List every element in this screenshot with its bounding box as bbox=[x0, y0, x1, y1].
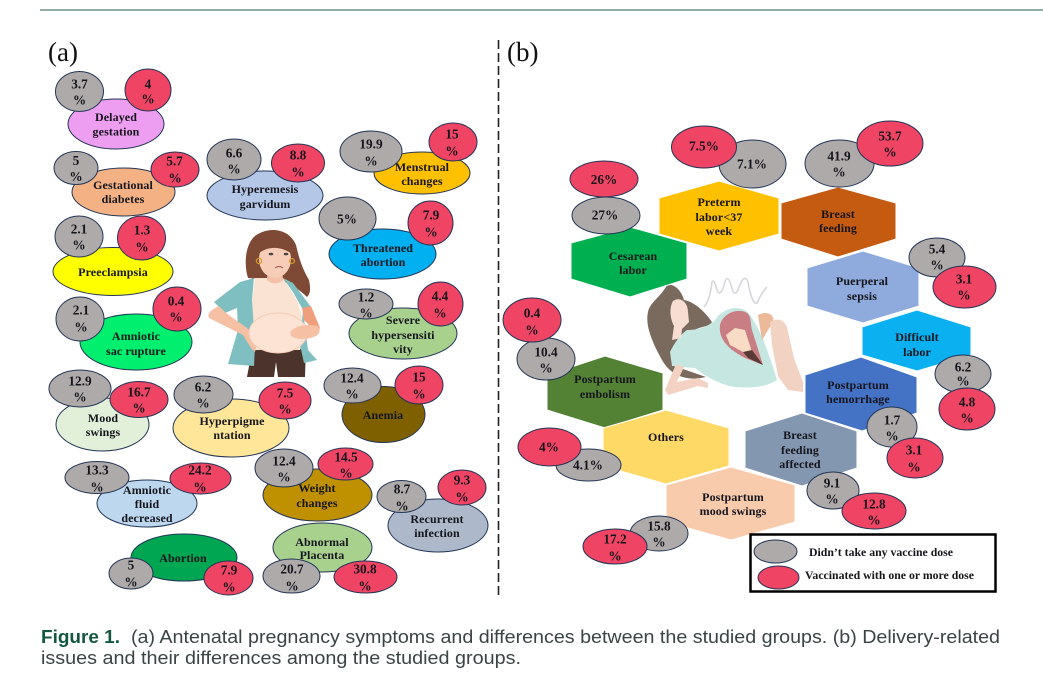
label: preeclampsia: Preeclampsia bbox=[78, 265, 148, 279]
label: postpartum embolism: Postpartum bbox=[574, 372, 636, 386]
bubble: gestational diabetes bbox=[72, 168, 175, 216]
values: breast feeding: % bbox=[832, 164, 846, 180]
label: abortion: Abortion bbox=[159, 551, 207, 565]
values: breast feeding: % bbox=[883, 144, 897, 160]
vaccinated value 7.9%: 7.9 bbox=[221, 562, 238, 578]
symptom: preeclampsia bbox=[53, 216, 173, 296]
values: preterm labor: 7.5% bbox=[689, 138, 719, 154]
vaccinated value 5.7%: % bbox=[168, 170, 182, 186]
no vaccine value 13.3% bbox=[65, 462, 129, 494]
vaccinated value 24.2%: % bbox=[193, 480, 207, 494]
hexagon: difficult labor bbox=[862, 310, 971, 371]
label: postpartum embolism: embolism bbox=[580, 387, 630, 401]
hexagon: others bbox=[603, 410, 729, 484]
vaccinated value 8.8%: 8.8 bbox=[290, 148, 307, 162]
vaccinated value 7.9% bbox=[408, 201, 453, 245]
hexagon: postpartum hemorrhage bbox=[805, 357, 917, 431]
caption: (a) Antenatal pregnancy symptoms and differences between the studied groups. (b) Delivery-related bbox=[131, 626, 1000, 647]
no vaccine value 20.7%: 20.7 bbox=[280, 562, 304, 576]
vaccinated value 8.8%: % bbox=[291, 164, 305, 180]
no vaccine value 5%: 5 bbox=[128, 558, 135, 572]
vaccinated value 5.7% bbox=[151, 152, 199, 187]
label: menstrual changes: Menstrual bbox=[395, 160, 450, 174]
vaccinated value 0.4%: % bbox=[169, 310, 183, 324]
no vaccine value 5% bbox=[109, 558, 153, 590]
icon: woman in labor illustration bbox=[647, 278, 803, 395]
symptom: threatened abortion bbox=[319, 197, 453, 279]
hexagon: postpartum embolism bbox=[547, 356, 663, 428]
symptom: hyperpigmentation bbox=[173, 376, 311, 457]
label: hyperemesis garvidum: garvidum bbox=[240, 197, 290, 211]
bubble: hyperpigmentation bbox=[173, 399, 289, 457]
bubble: preeclampsia bbox=[53, 248, 173, 296]
values: puerperal sepsis: 3.1 bbox=[956, 272, 972, 286]
values: postpartum hemorrhage bbox=[867, 407, 943, 478]
hexagon: postpartum mood swings bbox=[666, 467, 795, 540]
no vaccine value 6.2% bbox=[174, 376, 233, 413]
no vaccine value 12.9% bbox=[49, 370, 111, 407]
vaccinated value 16.7% bbox=[110, 382, 168, 418]
label: mood swings: Mood bbox=[88, 411, 118, 425]
vaccinated value 4.4%: 4.4 bbox=[432, 288, 449, 304]
label: others: Others bbox=[648, 430, 684, 444]
vaccinated value 7.9% bbox=[204, 561, 253, 595]
label: preterm labor: week bbox=[706, 224, 732, 238]
no vaccine value 3.7% bbox=[56, 72, 104, 112]
no vaccine value 5%: 5% bbox=[337, 212, 357, 226]
values: postpartum hemorrhage: 3.1 bbox=[906, 442, 922, 458]
values: breast feeding affected: 9.1 bbox=[824, 476, 840, 490]
label: amniotic fluid decreased: decreased bbox=[121, 511, 173, 525]
label: anemia: Anemia bbox=[363, 408, 403, 422]
values: cesarean labor: 27% bbox=[592, 208, 618, 222]
symptom: severe hypersensitivity bbox=[339, 282, 463, 359]
vaccinated value 7.5%: 7.5 bbox=[277, 386, 294, 400]
label: breast feeding: feeding bbox=[819, 221, 857, 235]
no vaccine value 12.4%: 12.4 bbox=[272, 454, 296, 468]
no vaccine value 19.9%: % bbox=[364, 154, 378, 168]
symptom: gestational diabetes bbox=[54, 152, 199, 216]
bubble: severe hypersensitivity bbox=[349, 308, 457, 359]
no vaccine value 12.4%: 12.4 bbox=[340, 370, 364, 386]
values: postpartum embolism: 0.4 bbox=[524, 306, 541, 320]
label: cesarean labor: labor bbox=[619, 263, 647, 277]
vaccinated value 4% bbox=[125, 69, 171, 111]
no vaccine value 1.2% bbox=[339, 289, 393, 320]
vaccinated value 15%: 15 bbox=[412, 370, 426, 384]
vaccinated value 1.3%: 1.3 bbox=[134, 222, 151, 238]
vaccinated value 4.4%: % bbox=[433, 306, 447, 320]
label: hyperpigmentation: ntation bbox=[213, 428, 251, 442]
no vaccine value 1.2%: % bbox=[359, 306, 373, 320]
vaccinated value 15% bbox=[395, 366, 443, 404]
vaccinated value 7.9%: 7.9 bbox=[423, 208, 440, 222]
vaccinated value 9.3%: 9.3 bbox=[454, 472, 471, 488]
vaccinated value 8.8% bbox=[272, 144, 324, 182]
vaccinated value 14.5%: % bbox=[339, 466, 353, 480]
label: gestational diabetes: diabetes bbox=[102, 192, 145, 206]
legend bbox=[750, 534, 996, 592]
values: postpartum mood swings: 17.2 bbox=[603, 532, 627, 546]
vaccinated value 7.9%: % bbox=[424, 224, 438, 240]
legend item: vaccinated bbox=[758, 566, 974, 589]
values: postpartum mood swings: % bbox=[652, 534, 666, 550]
vaccinated value 9.3% bbox=[438, 470, 486, 505]
values: preterm labor bbox=[672, 126, 786, 188]
no vaccine value 12.9%: % bbox=[73, 390, 87, 404]
no vaccine value 2.1% bbox=[55, 216, 103, 257]
no vaccine value 12.4% bbox=[324, 368, 381, 403]
no vaccine value 8.7%: 8.7 bbox=[394, 482, 411, 496]
no vaccine value 20.7%: % bbox=[285, 578, 299, 594]
vaccinated value 9.3%: % bbox=[455, 490, 469, 504]
vaccinated value 14.5%: 14.5 bbox=[334, 450, 358, 464]
icon: pregnant woman illustration bbox=[208, 230, 320, 377]
bubble: amniotic sac rupture bbox=[80, 314, 192, 370]
no vaccine value 2.1%: % bbox=[72, 238, 86, 252]
no vaccine value 20.7% bbox=[263, 559, 320, 594]
caption bbox=[41, 626, 1000, 668]
values: difficult labor bbox=[935, 355, 995, 430]
vaccinated value 1.3%: % bbox=[135, 240, 149, 254]
values: postpartum embolism: % bbox=[525, 322, 539, 338]
no vaccine value 13.3%: % bbox=[90, 480, 104, 494]
vaccinated value 16.7%: % bbox=[132, 400, 146, 416]
symptom: mood swings bbox=[49, 370, 168, 451]
label: delayed gestation: Delayed bbox=[95, 110, 137, 124]
vaccinated value 30.8%: % bbox=[358, 578, 372, 594]
vaccinated value 15%: 15 bbox=[445, 126, 459, 142]
vaccinated value 14.5% bbox=[318, 448, 373, 480]
vaccinated value 1.3% bbox=[118, 216, 166, 260]
label: amniotic sac rupture: sac rupture bbox=[106, 344, 167, 358]
no vaccine value 8.7%: % bbox=[395, 498, 409, 514]
values: postpartum embolism: 10.4 bbox=[534, 344, 558, 360]
values: difficult labor: % bbox=[956, 374, 970, 388]
no vaccine value 12.4% bbox=[255, 449, 313, 487]
no vaccine value 19.9% bbox=[340, 131, 402, 172]
bubble: anemia bbox=[342, 386, 425, 442]
values: breast feeding affected bbox=[807, 472, 906, 529]
bubble: delayed gestation bbox=[68, 99, 164, 149]
values: breast feeding affected: % bbox=[867, 512, 881, 528]
label: mood swings: swings bbox=[86, 425, 121, 439]
vaccinated value 15%: % bbox=[445, 144, 459, 158]
values: postpartum mood swings: % bbox=[608, 548, 622, 564]
values: puerperal sepsis bbox=[909, 238, 996, 308]
values: postpartum mood swings: 15.8 bbox=[647, 518, 671, 534]
vaccinated value 4%: 4 bbox=[145, 76, 152, 92]
label: cesarean labor: Cesarean bbox=[609, 249, 658, 263]
values: difficult labor: 4.8 bbox=[959, 394, 976, 410]
no vaccine value 2.1%: % bbox=[74, 320, 88, 334]
label: delayed gestation: gestation bbox=[93, 124, 140, 138]
no vaccine value 6.6%: % bbox=[227, 162, 241, 176]
bubble: amniotic fluid decreased bbox=[97, 480, 197, 527]
symptom: anemia bbox=[324, 366, 443, 442]
values: cesarean labor bbox=[570, 161, 640, 234]
no vaccine value 1.2%: 1.2 bbox=[358, 290, 375, 304]
caption: issues and their differences among the studied groups. bbox=[41, 647, 521, 668]
label: severe hypersensitivity: Severe bbox=[386, 313, 421, 327]
bubble: weight changes bbox=[263, 469, 372, 521]
values: puerperal sepsis: 5.4 bbox=[929, 242, 946, 256]
no vaccine value 12.4%: % bbox=[277, 470, 291, 484]
values: breast feeding bbox=[805, 121, 923, 187]
no vaccine value 8.7% bbox=[377, 480, 426, 514]
no vaccine value 6.6%: 6.6 bbox=[226, 146, 243, 160]
label: breast feeding affected: affected bbox=[779, 457, 821, 471]
symptom: amniotic fluid decreased bbox=[65, 462, 231, 527]
values: postpartum embolism bbox=[503, 298, 575, 380]
vaccinated value 7.9%: % bbox=[222, 580, 236, 594]
label: threatened abortion: abortion bbox=[361, 255, 406, 269]
label: recurrent infection: Recurrent bbox=[410, 512, 464, 526]
label: postpartum mood swings: Postpartum bbox=[702, 490, 764, 504]
bubble: abnormal placenta bbox=[273, 523, 372, 572]
panel label (b): (b) bbox=[507, 37, 538, 67]
values: postpartum hemorrhage: % bbox=[907, 460, 921, 474]
label: weight changes: changes bbox=[296, 496, 338, 510]
vaccinated value 5.7%: 5.7 bbox=[166, 154, 183, 168]
caption: Figure 1. bbox=[41, 626, 120, 647]
symptom: amniotic sac rupture bbox=[56, 287, 201, 370]
bubble: mood swings bbox=[56, 398, 149, 451]
hexagon: preterm labor bbox=[659, 181, 779, 251]
legend item: vaccinated: Vaccinated with one or more dose bbox=[805, 570, 974, 582]
symptom: weight changes bbox=[255, 448, 373, 521]
label: amniotic fluid decreased: fluid bbox=[135, 497, 159, 511]
panel label (a): (a) bbox=[48, 37, 78, 67]
label: weight changes: Weight bbox=[298, 481, 336, 495]
vaccinated value 15%: % bbox=[412, 386, 426, 402]
no vaccine value 2.1% bbox=[56, 297, 104, 341]
vaccinated value 0.4% bbox=[153, 287, 201, 331]
values: postpartum hemorrhage: % bbox=[885, 428, 899, 444]
values: postpartum embolism: % bbox=[539, 360, 553, 376]
no vaccine value 2.1%: 2.1 bbox=[71, 222, 87, 236]
vaccinated value 30.8% bbox=[334, 561, 397, 594]
vaccinated value 24.2%: 24.2 bbox=[188, 462, 212, 478]
values: postpartum hemorrhage: 1.7 bbox=[884, 412, 901, 428]
no vaccine value 5%: % bbox=[69, 169, 83, 184]
symptom: abortion bbox=[109, 534, 253, 595]
label: postpartum mood swings: mood swings bbox=[700, 504, 767, 518]
vaccinated value 7.5% bbox=[259, 382, 311, 419]
values: preterm labor: 7.1% bbox=[737, 156, 767, 172]
hexagon: cesarean labor bbox=[571, 227, 687, 297]
label: puerperal sepsis: Puerperal bbox=[836, 274, 889, 288]
vaccinated value 30.8%: 30.8 bbox=[353, 562, 377, 576]
no vaccine value 19.9%: 19.9 bbox=[359, 136, 383, 152]
label: recurrent infection: infection bbox=[414, 526, 460, 540]
vaccinated value 0.4%: 0.4 bbox=[168, 294, 185, 308]
panel: (a) antenatal pregnancy symptoms bbox=[48, 37, 488, 595]
vaccinated value 7.5%: % bbox=[278, 402, 292, 416]
hexagon: breast feeding bbox=[781, 187, 896, 257]
symptom: delayed gestation bbox=[56, 69, 171, 149]
no vaccine value 5%: % bbox=[124, 574, 138, 590]
symptom: recurrent infection bbox=[377, 470, 488, 552]
no vaccine value 3.7%: 3.7 bbox=[71, 76, 88, 92]
label: breast feeding: Breast bbox=[821, 207, 855, 221]
bubble: recurrent infection bbox=[388, 499, 488, 552]
values: others: 4% bbox=[539, 440, 559, 454]
label: abnormal placenta: Placenta bbox=[300, 548, 344, 562]
values: breast feeding: 53.7 bbox=[878, 128, 902, 144]
vaccinated value 16.7%: 16.7 bbox=[127, 384, 151, 400]
vaccinated value 4.4% bbox=[418, 282, 463, 326]
values: puerperal sepsis: % bbox=[957, 288, 971, 302]
bubble: threatened abortion bbox=[329, 229, 436, 279]
vaccinated value 24.2% bbox=[170, 462, 231, 494]
label: breast feeding affected: Breast bbox=[783, 428, 817, 442]
no vaccine value 12.9%: 12.9 bbox=[68, 374, 92, 388]
label: abnormal placenta: Abnormal bbox=[295, 535, 349, 549]
label: preterm labor: labor<37 bbox=[696, 210, 742, 224]
no vaccine value 12.4%: % bbox=[345, 386, 359, 402]
no vaccine value 6.2%: % bbox=[196, 396, 210, 410]
label: postpartum hemorrhage: Postpartum bbox=[827, 378, 889, 392]
label: hyperpigmentation: Hyperpigme bbox=[200, 414, 265, 428]
bubble: hyperemesis garvidum bbox=[207, 171, 323, 220]
values: others bbox=[518, 428, 621, 481]
label: amniotic fluid decreased: Amniotic bbox=[123, 483, 172, 497]
vaccinated value 4%: % bbox=[141, 92, 155, 106]
no vaccine value 13.3%: 13.3 bbox=[85, 462, 109, 478]
bubble: abortion bbox=[131, 534, 237, 581]
symptom: abnormal placenta bbox=[263, 523, 397, 594]
label: preterm labor: Preterm bbox=[697, 195, 741, 209]
label: breast feeding affected: feeding bbox=[781, 443, 819, 457]
label: severe hypersensitivity: vity bbox=[393, 342, 413, 356]
hexagon: breast feeding affected bbox=[745, 413, 857, 486]
values: postpartum mood swings bbox=[583, 516, 688, 564]
vaccinated value 15% bbox=[429, 123, 477, 161]
label: postpartum hemorrhage: hemorrhage bbox=[826, 392, 890, 406]
label: puerperal sepsis: sepsis bbox=[847, 289, 877, 303]
symptom: hyperemesis garvidum bbox=[207, 139, 324, 220]
hexagon: puerperal sepsis bbox=[807, 251, 919, 323]
label: difficult labor: labor bbox=[903, 345, 931, 359]
label: threatened abortion: Threatened bbox=[353, 241, 413, 255]
no vaccine value 5%: 5 bbox=[73, 153, 80, 168]
legend item: no vaccine bbox=[754, 540, 953, 563]
values: difficult labor: 6.2 bbox=[955, 360, 972, 374]
values: breast feeding affected: % bbox=[825, 492, 839, 506]
label: severe hypersensitivity: hypersensiti bbox=[371, 328, 435, 342]
no vaccine value 6.6% bbox=[207, 139, 261, 180]
symptom: menstrual changes bbox=[340, 123, 477, 194]
no vaccine value 6.2%: 6.2 bbox=[195, 380, 212, 394]
bubble: menstrual changes bbox=[374, 152, 470, 194]
label: gestational diabetes: Gestational bbox=[93, 178, 153, 192]
no vaccine value 2.1%: 2.1 bbox=[73, 302, 89, 318]
values: difficult labor: % bbox=[960, 410, 974, 426]
values: puerperal sepsis: % bbox=[930, 258, 944, 272]
label: difficult labor: Difficult bbox=[895, 330, 939, 344]
no vaccine value 3.7%: % bbox=[73, 92, 86, 108]
values: breast feeding affected: 12.8 bbox=[862, 496, 886, 512]
values: breast feeding: 41.9 bbox=[827, 148, 851, 164]
label: hyperemesis garvidum: Hyperemesis bbox=[232, 182, 299, 196]
label: menstrual changes: changes bbox=[401, 174, 443, 188]
label: amniotic sac rupture: Amniotic bbox=[112, 329, 161, 343]
no vaccine value 5% bbox=[54, 152, 98, 184]
panel: (b) delivery-related issues bbox=[503, 37, 996, 592]
values: others: 4.1% bbox=[573, 458, 603, 472]
legend item: no vaccine: Didn’t take any vaccine dose bbox=[809, 547, 953, 559]
values: cesarean labor: 26% bbox=[591, 172, 617, 187]
